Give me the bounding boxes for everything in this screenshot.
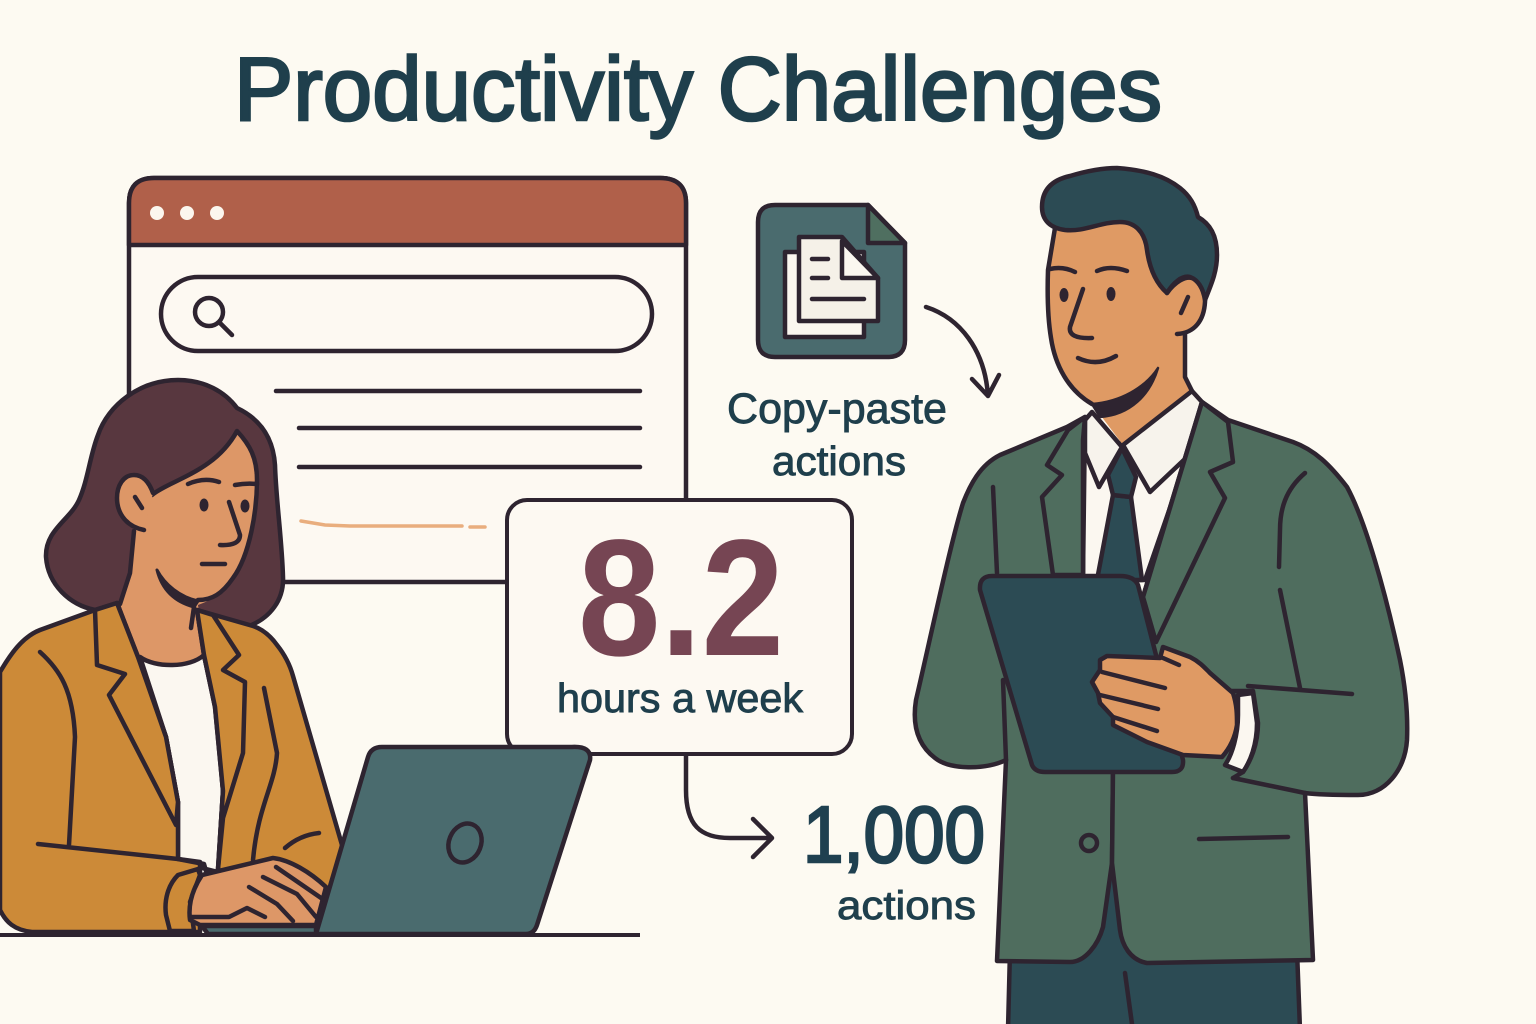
arrow: curved to man (926, 307, 999, 396)
result lines (276, 391, 640, 467)
arrow: card to 1,000 actions (686, 756, 772, 857)
left lapel (1042, 417, 1085, 575)
faint orange result line (301, 521, 485, 527)
woman hand typing (190, 858, 326, 925)
man with tablet (915, 168, 1407, 1024)
stat card: 8.2 hours a week (507, 500, 852, 754)
label: 1,000 actions: actions (837, 884, 976, 928)
icon: copy documents (758, 205, 905, 357)
title: Productivity Challenges (234, 40, 1162, 140)
label: copy-paste actions (727, 385, 947, 484)
woman hair (46, 380, 283, 626)
icon: magnifier (195, 298, 232, 335)
jacket left side (915, 417, 1113, 962)
woman skin: face and neck (120, 431, 257, 668)
right lapel (1143, 402, 1233, 642)
label: 1,000 actions (803, 790, 985, 928)
jacket right side and sleeve (1112, 402, 1407, 963)
man facial features (1050, 268, 1127, 362)
woman jacket (0, 603, 342, 932)
laptop logo (443, 818, 487, 868)
browser title bar (129, 178, 686, 245)
man ear (1167, 278, 1205, 334)
browser window (129, 178, 686, 582)
man shadow under chin (1092, 368, 1158, 417)
label: 1,000 actions: 1,000 (803, 790, 985, 879)
man face outline (1048, 228, 1192, 404)
woman at laptop (0, 380, 590, 934)
man skin: face and neck (1048, 215, 1200, 445)
man hair (1042, 168, 1217, 300)
big number: 8.2 (578, 506, 784, 691)
card caption: hours a week (557, 675, 804, 721)
woman facial features (157, 480, 257, 628)
search bar (161, 277, 652, 351)
man jacket (915, 402, 1407, 963)
man trousers (1008, 860, 1300, 1024)
man collar (1085, 391, 1202, 492)
jacket button (1081, 835, 1097, 851)
label: copy-paste actions: actions (772, 438, 906, 484)
tablet (980, 576, 1183, 772)
woman ear (117, 475, 153, 530)
man shirt cuff (1225, 686, 1352, 778)
woman face outline (120, 431, 257, 604)
woman cuff (166, 869, 200, 931)
jacket pocket (1199, 837, 1288, 839)
laptop (202, 747, 590, 934)
man hand (1092, 647, 1237, 757)
desk line (0, 933, 640, 937)
man shirt (1083, 440, 1190, 580)
label: copy-paste actions: Copy-paste (727, 385, 947, 433)
woman white top (140, 655, 223, 872)
man tie (1097, 448, 1142, 580)
window control dots (150, 206, 224, 220)
